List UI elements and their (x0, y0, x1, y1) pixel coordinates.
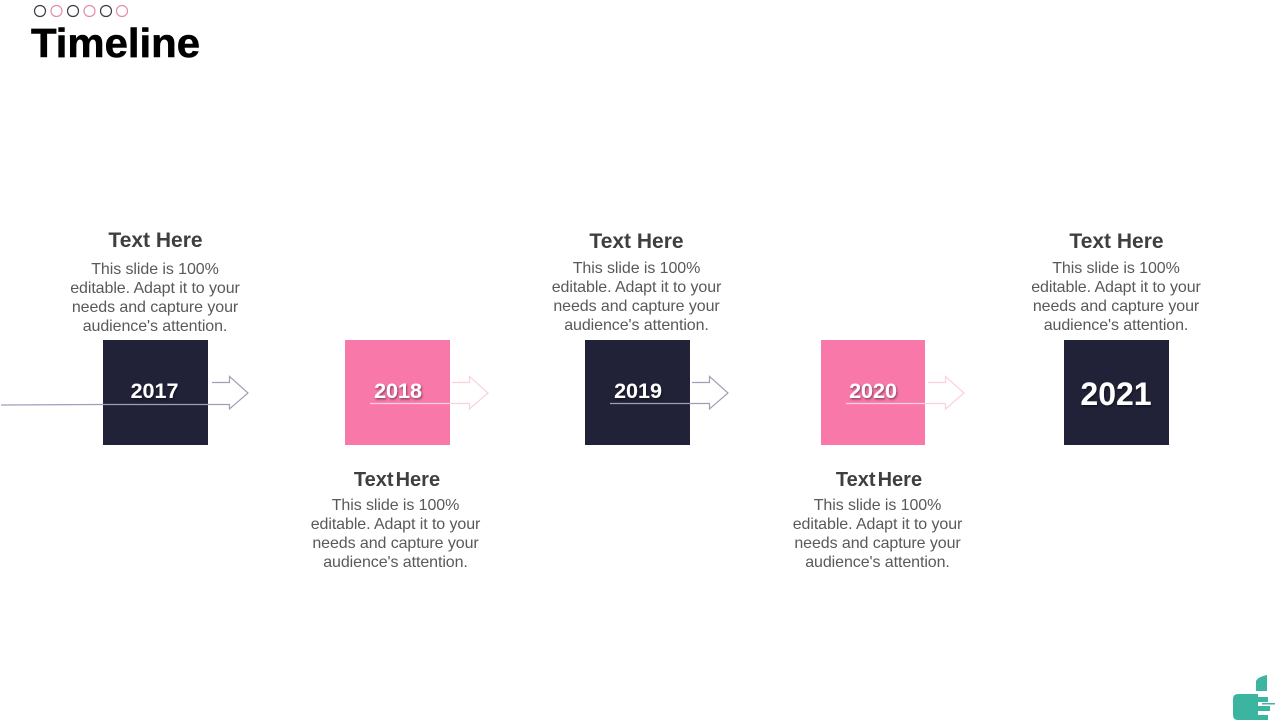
text block: 2020 (793, 469, 963, 571)
year box 2021 (1064, 340, 1169, 445)
year box 2019 (585, 340, 690, 445)
text block: 2017: editable. Adapt it to your (70, 280, 241, 297)
text block: 2017: needs and capture your (72, 299, 239, 316)
arrow 2020 (846, 376, 964, 409)
year box 2018 (345, 340, 450, 445)
year label 2021: 2021 (1080, 376, 1152, 412)
text block: 2018: editable. Adapt it to your (311, 516, 481, 533)
year label 2019: 2019 (614, 379, 662, 403)
text block: 2020: audience's attention. (805, 554, 950, 571)
text block: 2021: Text Here (1069, 230, 1164, 253)
text block: 2017 (70, 229, 241, 335)
milestone 2019 (552, 230, 728, 445)
milestone 2017 (1, 229, 248, 445)
text block: 2018: This slide is 100% (332, 497, 459, 514)
text block: 2021: needs and capture your (1033, 298, 1200, 315)
text block: 2021: This slide is 100% (1052, 260, 1180, 277)
milestone 2018 (311, 340, 488, 571)
year box 2017 (103, 340, 208, 445)
text block: 2020: This slide is 100% (814, 497, 941, 514)
arrow 2017 (1, 376, 248, 409)
milestone 2020 (793, 340, 964, 571)
text block: 2019: This slide is 100% (573, 260, 700, 277)
text block: 2017: audience's attention. (83, 318, 227, 335)
text block: 2021 (1031, 230, 1202, 334)
decorative circles row (34, 6, 128, 16)
text block: 2019: Text Here (589, 230, 684, 253)
text block: 2021: editable. Adapt it to your (1031, 279, 1202, 296)
year label 2018: 2018 (374, 379, 422, 403)
text block: 2019 (552, 230, 722, 334)
text block: 2018 (311, 469, 481, 571)
icon: thumbs up (1233, 675, 1275, 720)
text block: 2021: audience's attention. (1044, 317, 1188, 334)
text block: 2020: Text Here (836, 469, 922, 491)
text block: 2019: needs and capture your (553, 298, 720, 315)
text block: 2020: editable. Adapt it to your (793, 516, 963, 533)
arrow 2018 (370, 376, 488, 409)
text block: 2017: Text Here (108, 229, 203, 252)
arrow 2019 (610, 376, 728, 409)
text block: 2017: This slide is 100% (91, 261, 219, 278)
text block: 2019: editable. Adapt it to your (552, 279, 722, 296)
milestone 2021 (1031, 230, 1202, 445)
text block: 2018: Text Here (354, 469, 440, 491)
year label 2020: 2020 (849, 379, 897, 403)
text block: 2020: needs and capture your (794, 535, 961, 552)
text block: 2018: audience's attention. (323, 554, 468, 571)
year label 2017: 2017 (131, 379, 178, 403)
text block: 2019: audience's attention. (564, 317, 709, 334)
text block: 2018: needs and capture your (312, 535, 479, 552)
year box 2020 (821, 340, 925, 445)
title: Timeline (31, 20, 200, 66)
